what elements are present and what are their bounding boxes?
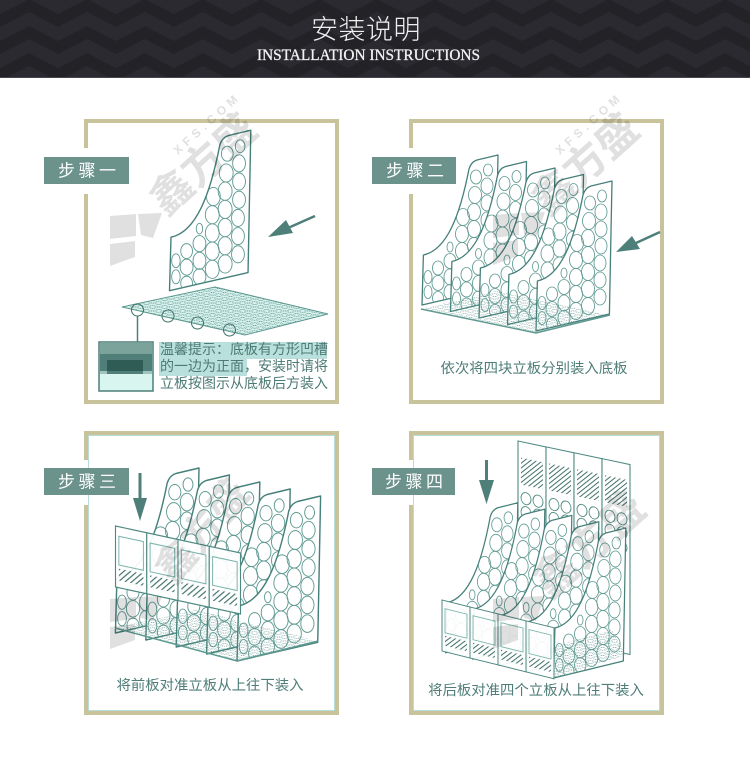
arrow: into base <box>268 216 315 237</box>
logo mark: step 3 <box>110 596 162 649</box>
arrow: downward <box>479 460 494 504</box>
watermark: step 2: 鑫方盛 <box>523 104 648 224</box>
panel: step 3 <box>86 433 337 713</box>
back panel <box>518 441 630 655</box>
tag: step 4: 步骤四 <box>385 472 446 492</box>
tip text: 温馨提示：底板有方形凹槽 <box>160 341 328 357</box>
front panel <box>116 526 240 614</box>
logo mark: step 4 <box>493 596 545 649</box>
panel: step 1 <box>86 121 337 402</box>
caption: 将后板对准四个立板从上往下装入 <box>428 682 644 699</box>
watermark: step 3: 鑫方盛 <box>147 472 258 592</box>
watermark: step 1: 鑫方盛 <box>141 104 266 224</box>
logo mark: step 2 <box>493 212 545 265</box>
front section <box>442 600 554 679</box>
title: Chinese: 安装说明 <box>311 15 421 45</box>
tag: step 1 <box>44 157 129 184</box>
arrow: downward <box>133 473 147 521</box>
panel: step 2 <box>411 121 662 402</box>
tag: step 2: 步骤二 <box>386 162 448 180</box>
tag: step 1: 步骤一 <box>58 162 120 180</box>
tip text: 的一边为正面，安装时请将 <box>160 358 328 374</box>
illustration: upright board and base <box>122 130 328 342</box>
watermark: step 1: XFS.COM <box>170 89 244 158</box>
caption: 依次将四块立板分别装入底板 <box>440 360 628 377</box>
header banner <box>0 0 750 78</box>
logo mark: step 1 <box>110 213 162 266</box>
tag: step 2 <box>372 157 456 184</box>
illustration: five boards <box>421 155 612 333</box>
tag: step 3 <box>44 468 129 495</box>
tag: step 4 <box>372 468 455 495</box>
watermark: step 2: XFS.COM <box>552 89 626 158</box>
panel: step 4 <box>411 433 662 713</box>
tip text: 立板按图示从底板后方装入 <box>160 375 328 391</box>
caption: 将前板对准立板从上往下装入 <box>116 677 304 694</box>
title: English: INSTALLATION INSTRUCTIONS <box>257 47 480 64</box>
arrow: into base <box>616 232 660 252</box>
tip text <box>159 341 328 391</box>
inset: base notch detail <box>99 342 153 391</box>
illustration: front panel fitting <box>115 468 321 661</box>
watermark: step 4: 鑫方盛 <box>524 483 655 607</box>
tag: step 3: 步骤三 <box>58 472 120 492</box>
illustration: back panel fitting <box>442 441 630 679</box>
